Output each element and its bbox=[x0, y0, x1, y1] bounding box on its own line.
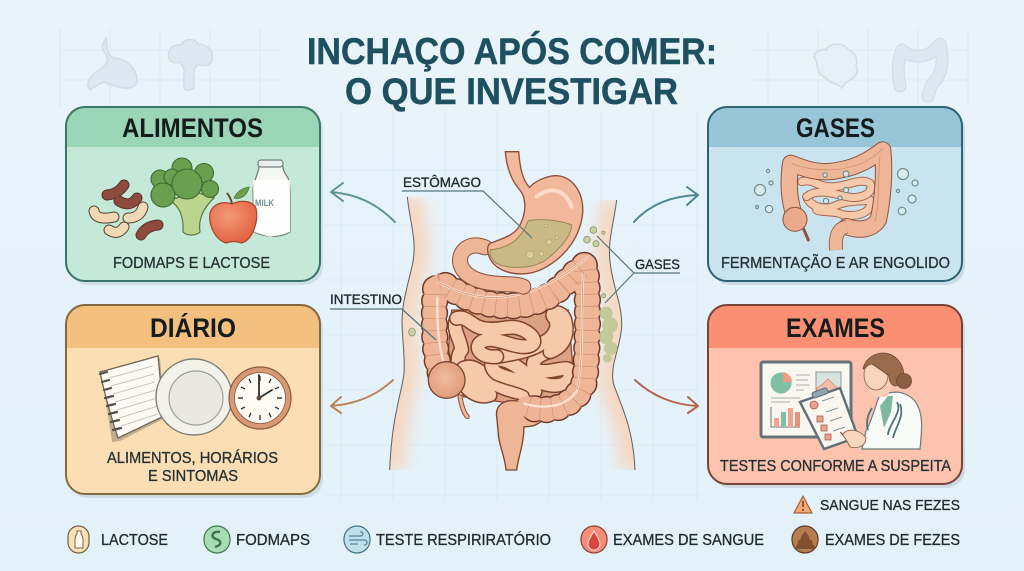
panel: diario bbox=[66, 305, 323, 498]
arrow: to exames bbox=[635, 380, 698, 413]
large intestine bbox=[428, 257, 588, 470]
arrow: to gases bbox=[634, 187, 698, 222]
legend: lactose bbox=[68, 526, 168, 553]
heading: alimentos: ALIMENTOS bbox=[122, 113, 263, 143]
panel: exames bbox=[708, 305, 965, 488]
title: INCHAÇO APÓS COMER: bbox=[307, 30, 717, 72]
legend: exames de sangue bbox=[581, 526, 764, 553]
label: estomago: ESTÔMAGO bbox=[403, 174, 481, 190]
icon: notebook bbox=[100, 356, 165, 442]
caption: alimentos, horarios e sintomas: ALIMENTOS, HORÁRIOS bbox=[107, 448, 278, 467]
heading: gases: GASES bbox=[796, 113, 875, 143]
title bbox=[307, 30, 717, 112]
heading: diario: DIÁRIO bbox=[150, 312, 236, 343]
caption: alimentos, horarios e sintomas: E SINTOMAS bbox=[148, 468, 238, 485]
legend: lactose: LACTOSE bbox=[101, 532, 168, 549]
label: gases bbox=[597, 236, 680, 303]
label: intestino bbox=[330, 291, 436, 340]
icon: plate bbox=[156, 359, 232, 435]
label: intestino: INTESTINO bbox=[330, 291, 402, 307]
panel: gases bbox=[708, 107, 965, 285]
gas bubbles and patch bbox=[409, 227, 618, 363]
panel: alimentos bbox=[66, 107, 323, 285]
icon: faint stomach bbox=[88, 38, 137, 90]
icon: faint gas cloud bbox=[814, 44, 857, 88]
stomach bbox=[460, 152, 583, 287]
arrow: to alimentos bbox=[331, 183, 395, 222]
icon: broccoli bbox=[151, 158, 218, 235]
small intestine bbox=[448, 310, 575, 407]
diagram: digestive system bbox=[390, 152, 635, 470]
title: O QUE INVESTIGAR bbox=[345, 71, 678, 112]
icon: faint broccoli bbox=[168, 40, 212, 90]
legend: fodmaps bbox=[204, 526, 310, 553]
icon: gas bubbles bbox=[754, 168, 918, 215]
label: gases: GASES bbox=[635, 256, 680, 272]
icon: monitor with charts bbox=[761, 362, 851, 437]
icon: apple bbox=[210, 187, 257, 243]
legend: exames de sangue: EXAMES DE SANGUE bbox=[613, 532, 764, 549]
legend: exames de fezes bbox=[792, 526, 960, 553]
arrow: to diario bbox=[331, 380, 393, 413]
icon: beans bbox=[94, 185, 158, 235]
icon: doctor bbox=[862, 353, 922, 449]
heading: exames: EXAMES bbox=[786, 313, 885, 343]
body outline bbox=[390, 197, 635, 470]
icon: intestine with bubbles bbox=[783, 148, 884, 250]
caption: fodmaps e lactose: FODMAPS E LACTOSE bbox=[113, 255, 270, 272]
caption: fermentacao e ar engolido: FERMENTAÇÃO E AR ENGOLIDO bbox=[721, 252, 950, 272]
icon: faint colon bbox=[898, 44, 942, 96]
legend: teste respiratorio: TESTE RESPIRIRATÓRIO bbox=[376, 532, 551, 549]
caption: alimentos, horarios e sintomas bbox=[107, 448, 278, 485]
legend: teste respiratorio bbox=[344, 526, 551, 553]
icon: milk bottle bbox=[253, 160, 290, 237]
legend: fodmaps: FODMAPS bbox=[236, 532, 310, 549]
appendix bbox=[460, 397, 467, 417]
caption: testes conforme a suspeita: TESTES CONFORME A SUSPEITA bbox=[720, 458, 951, 475]
warning: sangue nas fezes: SANGUE NAS FEZES bbox=[820, 498, 960, 514]
icon: milk bottle: MILK bbox=[255, 198, 274, 209]
label: estomago bbox=[402, 174, 532, 238]
icon: clipboard bbox=[800, 387, 866, 449]
icon: clock bbox=[229, 367, 291, 429]
legend: exames de fezes: EXAMES DE FEZES bbox=[825, 532, 960, 549]
